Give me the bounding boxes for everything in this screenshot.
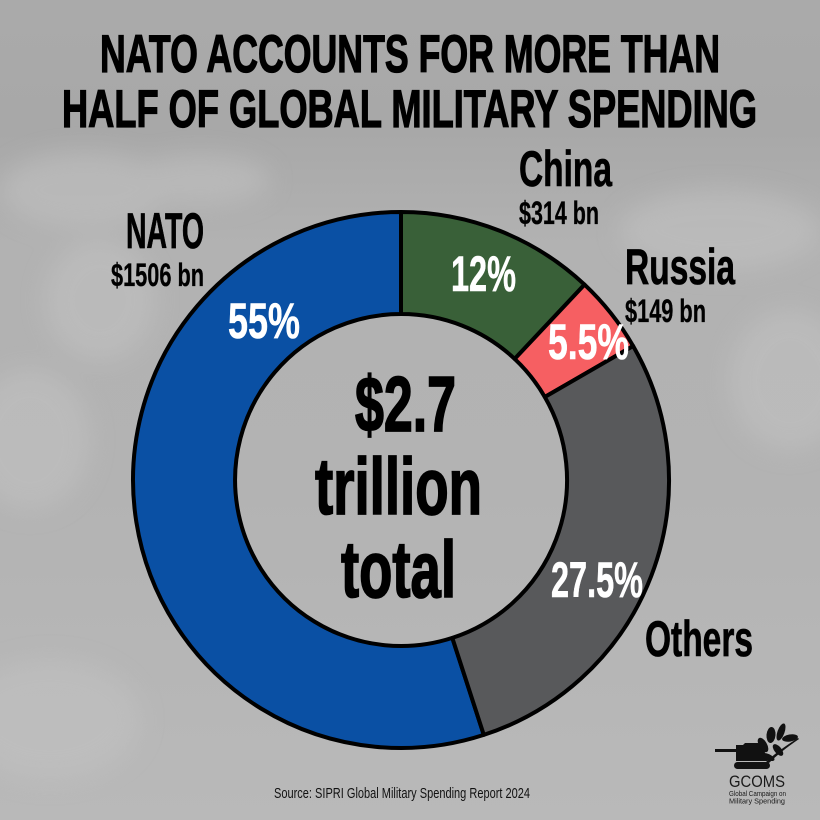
label: China: China [519, 141, 613, 197]
icon: tank with olive branch [715, 722, 799, 769]
label: NATO: NATO [126, 203, 204, 259]
percentage label: Russia: 5.5% [548, 314, 629, 370]
source note: Source: SIPRI Global Military Spending Report 2024 [274, 785, 530, 802]
logo: GCOMS [715, 722, 799, 806]
segment: China 12% [401, 212, 584, 359]
label: NATO: $1506 bn [111, 257, 204, 293]
label: Russia: $149 bn [625, 293, 706, 329]
segment: NATO 55% [133, 212, 484, 748]
logo wordmark: GCOMS [729, 772, 785, 791]
centre total label: total [341, 525, 456, 614]
segment: Others 27.5% [452, 346, 669, 735]
donut chart [133, 212, 669, 748]
label: China: $314 bn [519, 195, 599, 231]
label: Others: Others [645, 611, 753, 667]
logo tagline [729, 791, 786, 806]
label: Russia: Russia [625, 239, 736, 295]
percentage label: China: 12% [451, 246, 516, 302]
centre total label [315, 360, 482, 614]
title [62, 25, 757, 139]
centre total label: trillion [315, 442, 482, 531]
label: NATO [111, 203, 204, 293]
label: China [519, 141, 613, 231]
percentage label: Others: 27.5% [551, 552, 643, 608]
label: Russia [625, 239, 736, 329]
percentage label: NATO: 55% [228, 293, 300, 349]
segment: Russia 5.5% [515, 285, 633, 397]
logo tagline: Military Spending [729, 798, 785, 806]
logo tagline: Global Campaign on [729, 791, 786, 798]
centre total label: $2.7 [355, 360, 456, 448]
